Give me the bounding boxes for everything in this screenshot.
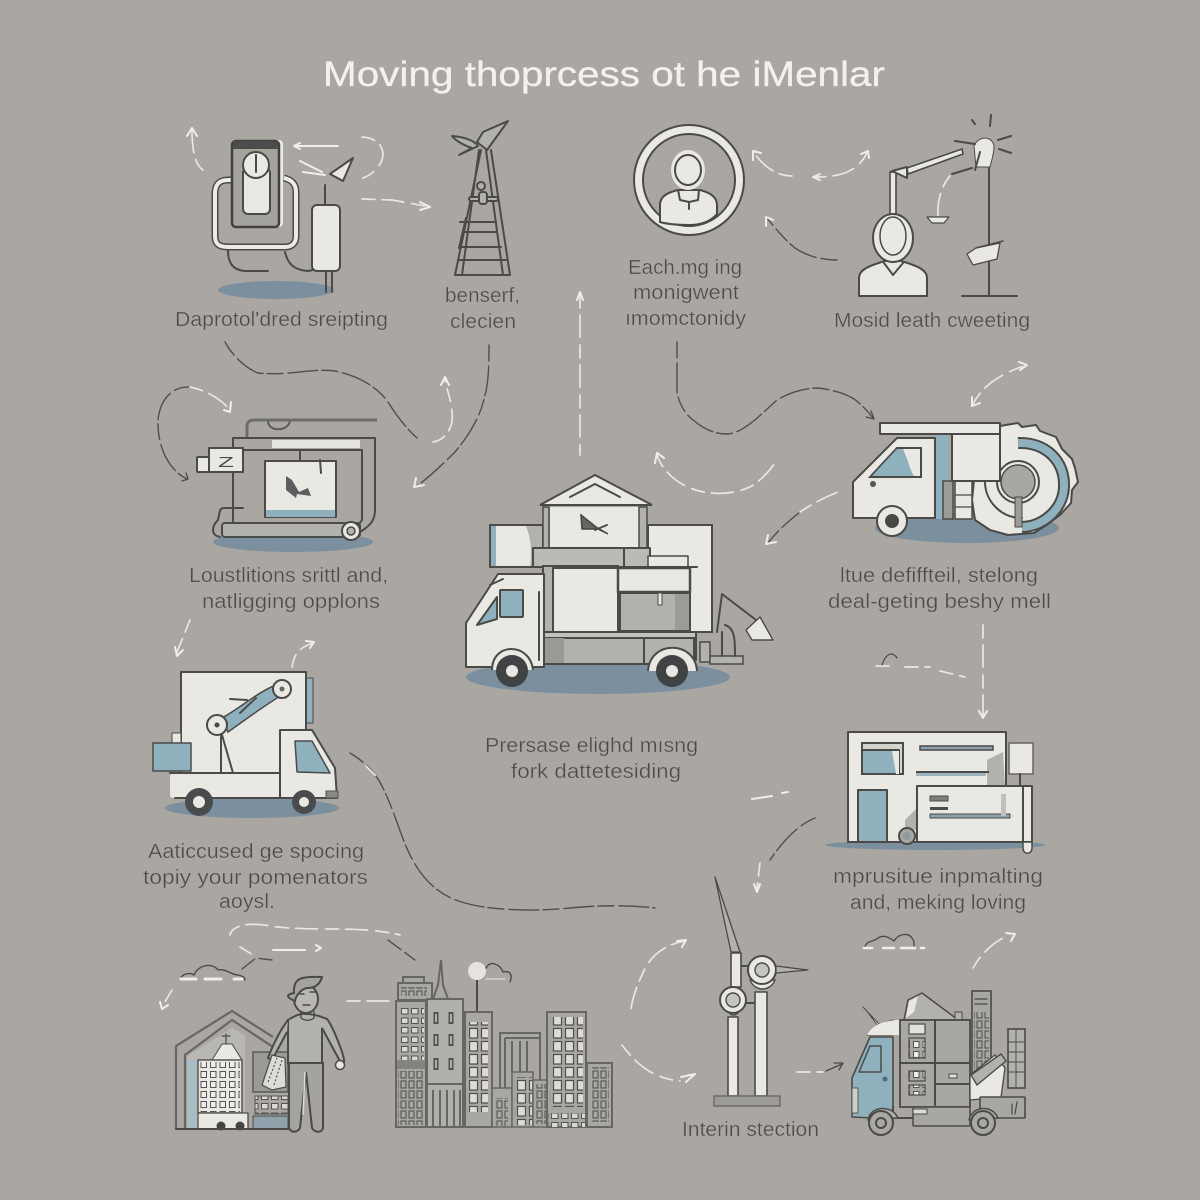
label: step 8 bbox=[833, 866, 1043, 914]
label: center bbox=[485, 735, 698, 783]
label: step 6: ltue defiffteil, stelong bbox=[840, 565, 1038, 587]
icon: person in circle bbox=[634, 125, 744, 235]
icon: wind turbines bbox=[714, 877, 808, 1106]
label: step 7 bbox=[143, 841, 368, 913]
label: step 5: Loustlitions srittl and, bbox=[189, 565, 388, 587]
icon: machine frame: Z bbox=[218, 454, 234, 471]
icon: small truck with arm bbox=[153, 672, 339, 818]
label: step 3 bbox=[625, 257, 746, 330]
flow arrows bbox=[158, 128, 1027, 1082]
truck shadow bbox=[466, 660, 730, 694]
label: step 3: ımomctonidy bbox=[625, 308, 746, 330]
label: center: Prersase elighd mısng bbox=[485, 735, 698, 757]
device shadow bbox=[218, 281, 334, 299]
label: step 2 bbox=[445, 285, 520, 333]
label: step 8: mprusitue inpmalting bbox=[833, 866, 1043, 888]
label: step 8: and, meking loving bbox=[850, 892, 1026, 914]
label: step 2: clecien bbox=[450, 311, 516, 333]
icon: cloud right bbox=[864, 934, 924, 948]
label: step 3: Each.mɡ ing bbox=[628, 257, 742, 279]
icon: central moving truck bbox=[466, 475, 773, 694]
label: step 5: natligging opplons bbox=[202, 591, 380, 613]
icon: truck with gear bbox=[853, 423, 1078, 543]
label: step 7: Aaticcused ge spocing bbox=[148, 841, 364, 863]
icon: person under lamp bbox=[859, 115, 1017, 296]
title: Moving thoprcess ot he iMenlar bbox=[323, 55, 885, 94]
icon: loaded truck bbox=[852, 991, 1025, 1135]
icon: building with right panel bbox=[825, 732, 1045, 853]
icon: city skyline bbox=[396, 960, 612, 1127]
label: center: fork dattetesiding bbox=[511, 761, 681, 783]
label: step 2: benserf, bbox=[445, 285, 520, 307]
icon: windmill tower bbox=[452, 121, 510, 275]
label: step 6 bbox=[828, 565, 1051, 613]
icon: house and person bbox=[176, 977, 344, 1132]
label: step 7: aoysl. bbox=[219, 891, 275, 913]
icon: cloud left bbox=[181, 965, 245, 980]
label: step 6: deal-geting beshy mell bbox=[828, 591, 1051, 613]
icon: machine frame bbox=[197, 420, 377, 552]
label: step 1: Daprotol'dred sreipting bbox=[175, 309, 388, 331]
icon: phone and device bbox=[215, 140, 353, 299]
label: step 4: Mosid leath cweeting bbox=[834, 310, 1030, 332]
label: step 3: monigwent bbox=[633, 282, 739, 304]
label: step 9: Interin stection bbox=[682, 1119, 819, 1141]
label: step 5 bbox=[189, 565, 388, 613]
label: step 7: topiy your pomenators bbox=[143, 867, 368, 889]
